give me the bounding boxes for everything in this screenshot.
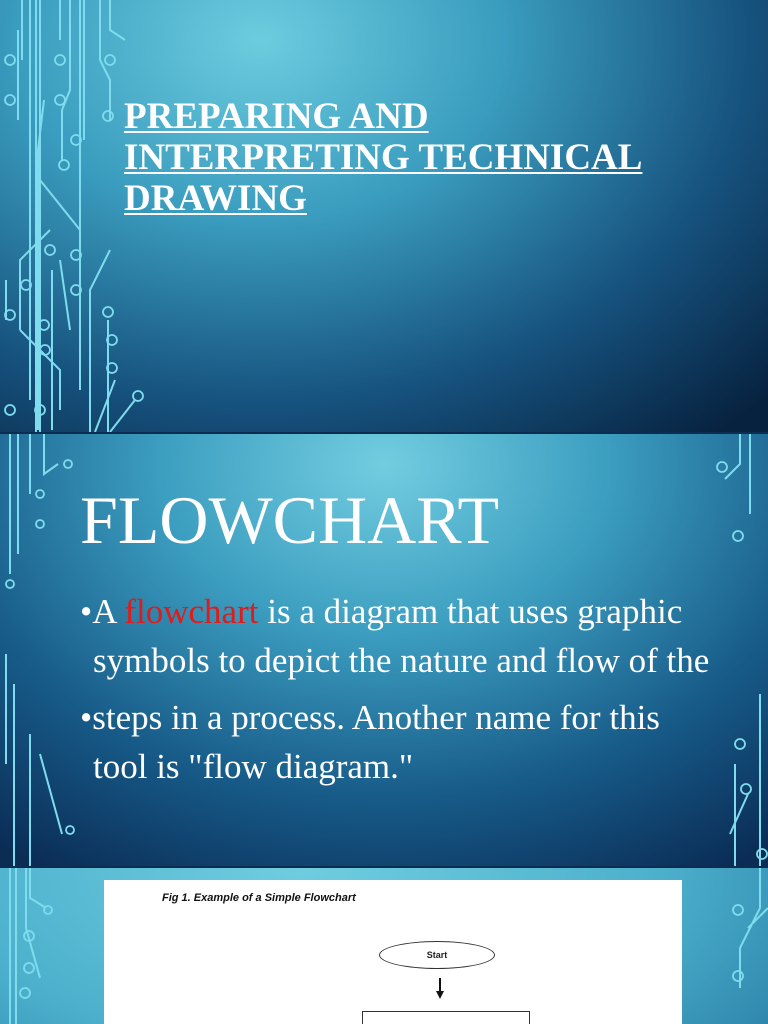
slide 1 (0, 0, 768, 432)
slide 2 (0, 434, 768, 866)
circuit decoration left (4, 0, 144, 432)
body text: tool is "flow diagram." (93, 747, 413, 786)
figure caption: Fig 1. Example of a Simple Flowchart (162, 892, 356, 904)
body text: •steps in a process. Another name for this (80, 698, 660, 737)
body text: •A flowchart is a diagram that uses graphic (80, 592, 682, 631)
start oval: Start (427, 950, 447, 960)
body text: symbols to depict the nature and flow of the (93, 641, 709, 680)
circuit decoration (9, 868, 768, 1024)
process box (362, 1011, 530, 1024)
body text (80, 592, 709, 786)
title (124, 96, 642, 219)
arrow (436, 978, 444, 999)
circuit decoration sides (5, 434, 768, 866)
heading: flowchart: FLOWCHART (80, 482, 499, 558)
figure: simple flowchart (104, 880, 682, 1024)
start oval (379, 941, 495, 969)
slide 3 (0, 868, 768, 1024)
title: INTERPRETING TECHNICAL (124, 137, 642, 178)
title: PREPARING AND (124, 96, 429, 137)
title: DRAWING (124, 178, 307, 219)
